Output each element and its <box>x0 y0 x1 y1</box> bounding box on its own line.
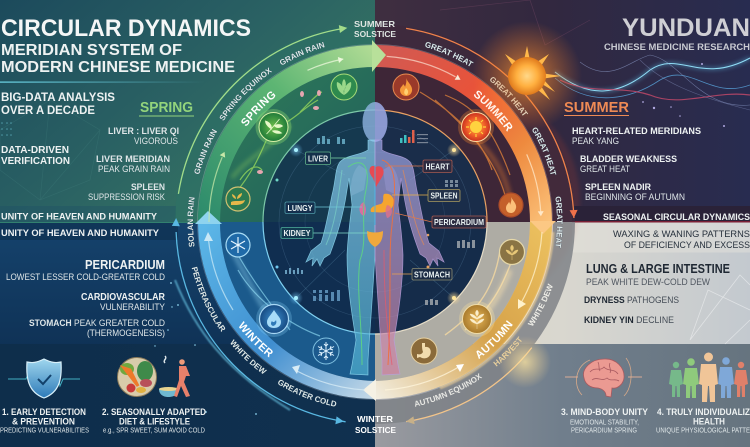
season bands <box>198 44 552 400</box>
benefit 1: early detection: & PREVENTION <box>12 416 75 426</box>
meridian lines <box>326 160 424 365</box>
summer text panel: SPLEEN NADIR <box>585 182 651 193</box>
unity captions: UNITY OF HEAVEN AND HUMANITY <box>1 212 158 222</box>
spring text panel: VIGOROUS <box>134 136 178 147</box>
zones between band and inner circle <box>175 24 575 424</box>
outer ring solar term labels: SPRING EQUINOX <box>220 67 272 120</box>
outer ring solar term labels: GREAT HEAT <box>490 77 528 116</box>
label: stomach: STOMACH <box>414 270 450 280</box>
label: liver: LIVER <box>308 154 328 164</box>
outer ring solar term labels: SOLAN RAIN <box>187 197 195 247</box>
autumn text panel: LUNG & LARGE INTESTINE <box>586 262 730 276</box>
header: yunduan brand: CHINESE MEDICINE RESEARCH <box>604 42 750 53</box>
summer text panel <box>564 100 701 203</box>
qi wave decoration <box>555 55 750 127</box>
spring text panel: PEAK GRAIN RAIN <box>98 164 170 175</box>
solstice labels: SOLSTICE <box>354 29 396 39</box>
benefit 1: early detection: PREDICTING VULNERABILITIES <box>0 426 89 434</box>
horizontal caption bars <box>0 206 750 252</box>
inner arrow tips <box>204 56 544 374</box>
organs <box>351 165 399 247</box>
winter text panel: PERICARDIUM <box>85 258 165 272</box>
season names on bands <box>239 90 513 359</box>
icon: flame right <box>499 193 523 217</box>
season names on bands: SUMMER <box>474 90 512 132</box>
benefit 1: early detection: 1. EARLY DETECTION <box>2 407 86 417</box>
icon: sun badge <box>458 109 494 145</box>
icon: snow left <box>226 233 250 257</box>
outer ring solar term labels: PERTERASCULAR <box>192 266 226 332</box>
summer text panel: GREAT HEAT <box>580 164 630 175</box>
seasonal wheel <box>172 19 579 435</box>
outer ring solar term labels <box>187 42 563 407</box>
outer arc arrowheads <box>172 24 578 426</box>
benefit 2: diet and lifestyle: e.g., SPR SWEET, SUM AVOID COLD <box>103 426 205 434</box>
summer text panel: BEGINNING OF AUTUMN <box>585 192 685 203</box>
benefit 3: mind-body unity: EMOTIONAL STABILITY, <box>570 420 639 426</box>
benefit 3: mind-body unity: 3. MIND-BODY UNITY <box>561 407 648 417</box>
label: spleen: SPLEEN <box>430 190 458 200</box>
benefit 4: individualized health: HEALTH <box>693 416 725 426</box>
icon: brain <box>565 358 642 397</box>
label: pericardium: PERICARDIUM <box>434 217 484 227</box>
outer ring solar term labels: GREAT HEAT <box>425 42 474 66</box>
outer ring solar term labels: HARVEST <box>493 336 522 366</box>
seasonal wisps <box>232 90 515 336</box>
node lights <box>276 143 461 305</box>
outer ring solar term labels: GRAIN RAIN <box>194 128 218 174</box>
solstice labels: SOLSTICE <box>355 425 396 435</box>
icon: five people <box>669 352 748 402</box>
inner dark circle <box>263 110 487 334</box>
left intro text: BIG-DATA ANALYSIS <box>1 92 115 104</box>
spring text panel: LIVER MERIDIAN <box>96 154 170 165</box>
spring text panel: SPLEEN <box>131 182 165 193</box>
winter text panel: VULNERABILITY <box>100 302 166 313</box>
winter text panel: STOMACH PEAK GREATER COLD <box>29 318 165 329</box>
outer ring solar term labels: GREATER COLD <box>278 380 336 406</box>
outer ring solar term labels: WHITE DEW <box>528 284 553 326</box>
winter text panel: (THERMOGENESIS) <box>87 328 165 339</box>
autumn text panel: KIDNEY YIN DECLINE <box>584 315 674 326</box>
autumn text panel <box>584 262 730 326</box>
autumn text panel: DRYNESS PATHOGENS <box>584 295 679 306</box>
solstice labels: SUMMER <box>354 19 395 29</box>
benefit 3: mind-body unity <box>561 358 648 434</box>
label: lungy: LUNGY <box>288 203 313 213</box>
spring text panel: SPRING <box>140 100 193 116</box>
benefit 2: diet and lifestyle: 2. SEASONALLY ADAPTED <box>102 407 206 417</box>
header: yunduan brand: YUNDUAN <box>622 14 750 42</box>
icon: bowl and walking figure <box>159 356 190 397</box>
title: MODERN CHINESE MEDICINE <box>1 59 235 76</box>
label: heart: HEART <box>426 162 450 172</box>
human body figure <box>306 102 444 375</box>
title <box>0 15 251 83</box>
left intro text: OVER A DECADE <box>1 105 95 117</box>
label: spleen <box>428 190 460 202</box>
seasonal dynamics caption <box>603 212 750 251</box>
inner band arrows <box>208 56 542 390</box>
icon: water drop <box>256 301 292 337</box>
unity captions: UNITY OF HEAVEN AND HUMANITY <box>1 228 160 239</box>
band arrowheads <box>195 40 556 401</box>
season names on bands: WINTER <box>239 321 273 358</box>
title: MERIDIAN SYSTEM OF <box>1 42 182 59</box>
benefit 1: early detection <box>0 359 89 434</box>
seasonal dynamics caption: WAXING & WANING PATTERNS <box>613 229 750 240</box>
winter text panel: LOWEST LESSER COLD-GREATER COLD <box>6 272 165 283</box>
outer ring solar term labels: GREAT HEAT <box>555 196 563 248</box>
season names on bands: SPRING <box>241 92 276 126</box>
icon: leaf <box>331 74 357 100</box>
summer text panel: BLADDER WEAKNESS <box>580 154 677 165</box>
lower left flare <box>175 280 290 410</box>
outer thin arcs <box>176 28 574 422</box>
outer ring solar term labels: GRAIN RAIN <box>280 42 325 65</box>
benefit 2: diet and lifestyle <box>102 356 206 434</box>
winter text panel: CARDIOVASCULAR <box>81 291 165 303</box>
unity captions <box>1 212 160 239</box>
icon: hand with sprout <box>226 187 250 211</box>
summer text panel: SUMMER <box>564 100 630 116</box>
label: heart <box>423 160 452 172</box>
label: liver <box>306 152 330 164</box>
mini data charts <box>285 130 475 305</box>
label: kidney: KIDNEY <box>284 228 311 238</box>
summer text panel: PEAK YANG <box>572 136 619 147</box>
spring text panel: SUPPRESSION RISK <box>88 192 166 203</box>
flare at lower right of wheel <box>440 232 553 388</box>
benefit 4: individualized health <box>656 352 750 434</box>
benefit 2: diet and lifestyle: DIET & LIFESTYLE <box>119 416 190 426</box>
icon: shield <box>8 359 80 398</box>
icon: stomach <box>411 338 437 364</box>
outer ring solar term labels: GREAT HEAT <box>532 127 556 175</box>
solstice labels <box>354 19 396 435</box>
solstice labels: WINTER <box>357 414 393 424</box>
spring text panel: LIVER : LIVER QI <box>108 126 179 137</box>
icon: flame top <box>393 74 419 100</box>
icon: wheat right <box>500 240 524 264</box>
outer ring solar term labels: AUTUMN EQUINOX <box>415 373 482 407</box>
spring text panel <box>88 100 194 203</box>
autumn text panel: PEAK WHITE DEW-COLD DEW <box>586 277 710 288</box>
left intro text: DATA-DRIVEN <box>1 144 69 156</box>
title: CIRCULAR DYNAMICS <box>1 15 251 42</box>
outer ring solar term labels: WHITE DEW <box>230 339 267 374</box>
winter text panel <box>6 258 257 415</box>
left intro text: VERIFICATION <box>1 155 70 167</box>
icon: snowflake <box>313 338 339 364</box>
header: yunduan brand <box>604 14 750 53</box>
summer text panel: HEART-RELATED MERIDIANS <box>572 126 701 137</box>
icon: food plate <box>118 358 156 396</box>
icon: wheat <box>459 301 495 337</box>
organ callout labels <box>281 152 486 280</box>
sun <box>472 21 582 131</box>
season names on bands: AUTUMN <box>476 320 513 359</box>
icon: spring sprout <box>256 109 292 145</box>
benefit 3: mind-body unity: PERICARDIUM SPRING <box>571 428 637 434</box>
left intro text <box>1 92 115 167</box>
